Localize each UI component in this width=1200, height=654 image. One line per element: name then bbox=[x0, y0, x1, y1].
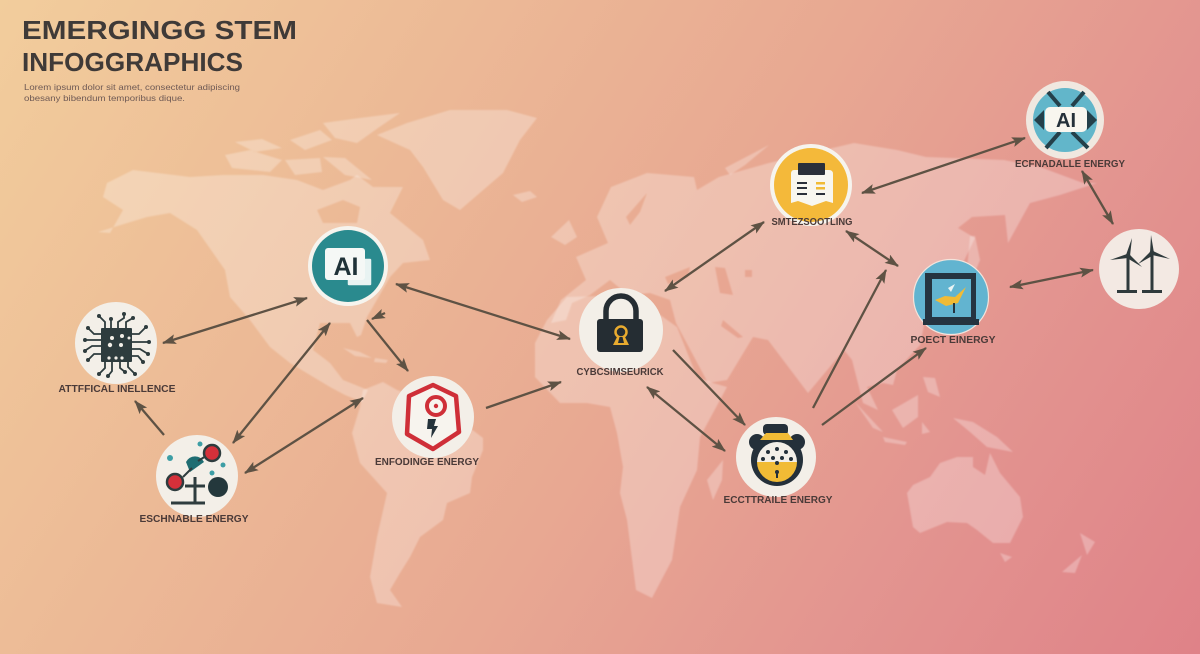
australia bbox=[907, 453, 1023, 543]
subtitle text: Lorem ipsum dolor sit amet, consectetur adipiscing bbox=[24, 82, 240, 92]
madagascar bbox=[707, 460, 723, 500]
icon: clock bbox=[749, 424, 805, 486]
node: AI teal bbox=[308, 226, 388, 306]
icon: document bbox=[791, 163, 833, 206]
eurasia bbox=[551, 143, 1097, 410]
node: cybersecurity lock bbox=[576, 288, 664, 378]
node: clock bear bbox=[724, 417, 832, 506]
node: molecule bbox=[140, 435, 248, 525]
icon: molecule bbox=[167, 442, 228, 503]
label: ECFNADALLE ENERGY bbox=[1015, 158, 1125, 170]
title bbox=[22, 15, 297, 77]
icon: shield bbox=[407, 385, 459, 449]
world map bbox=[98, 110, 1097, 607]
node: AI globe bbox=[1015, 81, 1125, 170]
caribbean islands bbox=[343, 348, 388, 363]
southeast asia islands bbox=[855, 377, 940, 445]
label: ESCHNABLE ENERGY bbox=[140, 513, 248, 525]
north america bbox=[98, 170, 430, 402]
title: INFOGGRAPHICS bbox=[22, 47, 243, 77]
greenland bbox=[377, 110, 537, 210]
label: ENFODINGE ENERGY bbox=[375, 456, 479, 468]
node: AI teal: AI bbox=[334, 253, 358, 281]
iceland bbox=[513, 191, 537, 202]
node: laptop bbox=[910, 260, 996, 346]
subtitle text bbox=[24, 82, 240, 103]
africa bbox=[535, 296, 727, 598]
new guinea bbox=[953, 418, 1013, 452]
icon: turbines bbox=[1110, 235, 1170, 293]
south america bbox=[352, 382, 483, 607]
node: yellow document bbox=[770, 144, 852, 228]
label: SMTEZSOOTLING bbox=[772, 216, 852, 228]
label: CYBCSIMSEURICK bbox=[576, 366, 664, 378]
icon: circuit chip bbox=[83, 312, 151, 378]
node: shield energy bbox=[375, 376, 479, 468]
node: wind turbines bbox=[1099, 229, 1179, 309]
title: EMERGINGG STEM bbox=[22, 15, 297, 45]
connection arrows bbox=[135, 138, 1113, 473]
node: artificial intelligence chip bbox=[58, 302, 176, 395]
icon: laptop screen bbox=[923, 273, 979, 325]
label: POECT EINERGY bbox=[910, 334, 996, 346]
label: ATTFFICAL INELLENCE bbox=[58, 383, 176, 395]
tasmania and new zealand bbox=[1000, 533, 1095, 573]
label: ECCTTRAILE ENERGY bbox=[724, 494, 832, 506]
icon: AI globe: AI bbox=[1056, 110, 1076, 132]
icon: padlock bbox=[597, 296, 643, 352]
uk and japan bbox=[551, 145, 980, 272]
subtitle text: obesany bibendum temporibus dique. bbox=[24, 93, 185, 103]
arctic islands bbox=[225, 113, 400, 180]
